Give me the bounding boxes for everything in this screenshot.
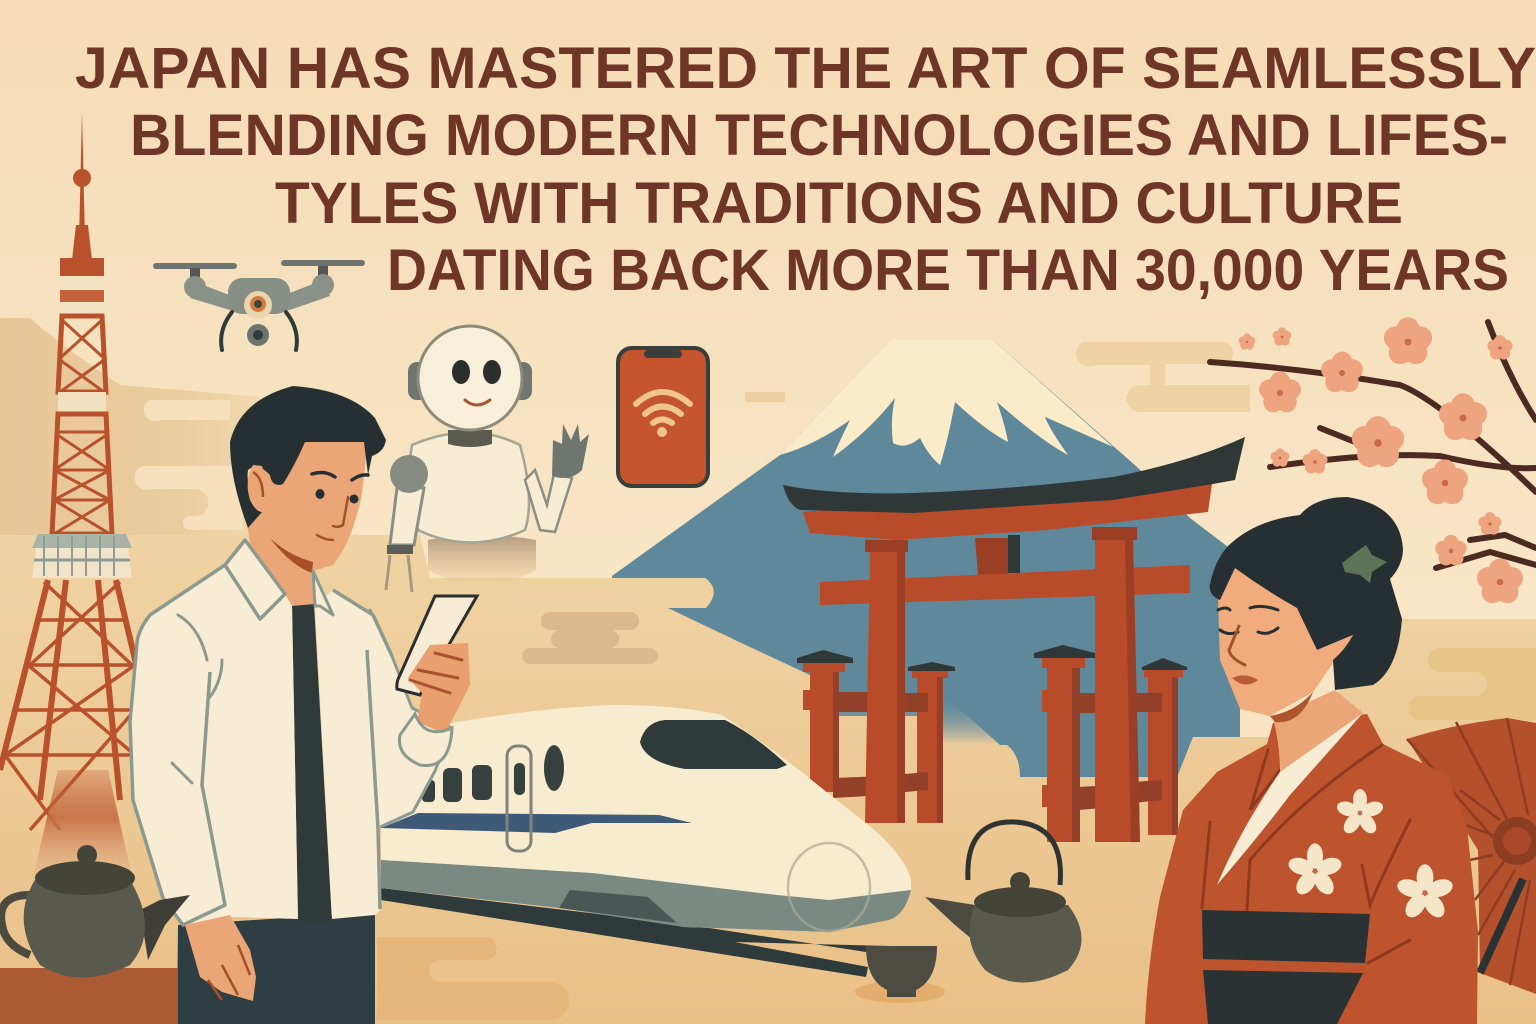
kimono flowers [1335, 789, 1385, 837]
drone [153, 260, 365, 350]
Mount Fuji [612, 340, 1240, 785]
table [0, 968, 178, 1024]
neck and face [1273, 690, 1363, 772]
collar [1217, 713, 1363, 885]
lower hand [185, 915, 256, 1001]
woman in kimono [1145, 497, 1536, 1024]
central strut [975, 538, 1008, 575]
torii roof [783, 437, 1245, 513]
neck and face [245, 510, 330, 606]
teapot left [1, 845, 190, 978]
tee [292, 604, 332, 922]
ground and front clouds [0, 535, 1536, 1024]
title: BLENDING MODERN TECHNOLOGIES AND LIFES- [130, 103, 1508, 168]
title: JAPAN HAS MASTERED THE ART OF SEAMLESSLY [75, 36, 1536, 101]
main pillars and beams [820, 565, 1190, 605]
shirt body [130, 565, 298, 925]
Tokyo tower [0, 112, 140, 890]
teapot right and cup [855, 822, 1082, 1003]
smartphone icon [618, 348, 708, 486]
shinkansen train [381, 705, 911, 977]
robot [386, 326, 589, 592]
kasagi [803, 477, 1213, 540]
title: DATING BACK MORE THAN 30,000 YEARS [387, 238, 1509, 303]
man with phone [130, 386, 477, 1024]
hair [1210, 497, 1403, 690]
small support pillars [803, 658, 1183, 842]
cherry blossom branch [1210, 317, 1536, 608]
collar [225, 540, 285, 619]
tie beams [833, 668, 1178, 842]
title [75, 36, 1536, 303]
obi [1202, 910, 1370, 1024]
pants [177, 912, 375, 1024]
parasol [1407, 718, 1536, 994]
title: TYLES WITH TRADITIONS AND CULTURE [275, 171, 1403, 236]
shirt sleeve and hand on phone [370, 596, 477, 828]
kimono [1145, 714, 1478, 1024]
torii gate [783, 437, 1245, 842]
background hills and clouds [0, 318, 1250, 560]
pillar roofs [797, 645, 1187, 671]
